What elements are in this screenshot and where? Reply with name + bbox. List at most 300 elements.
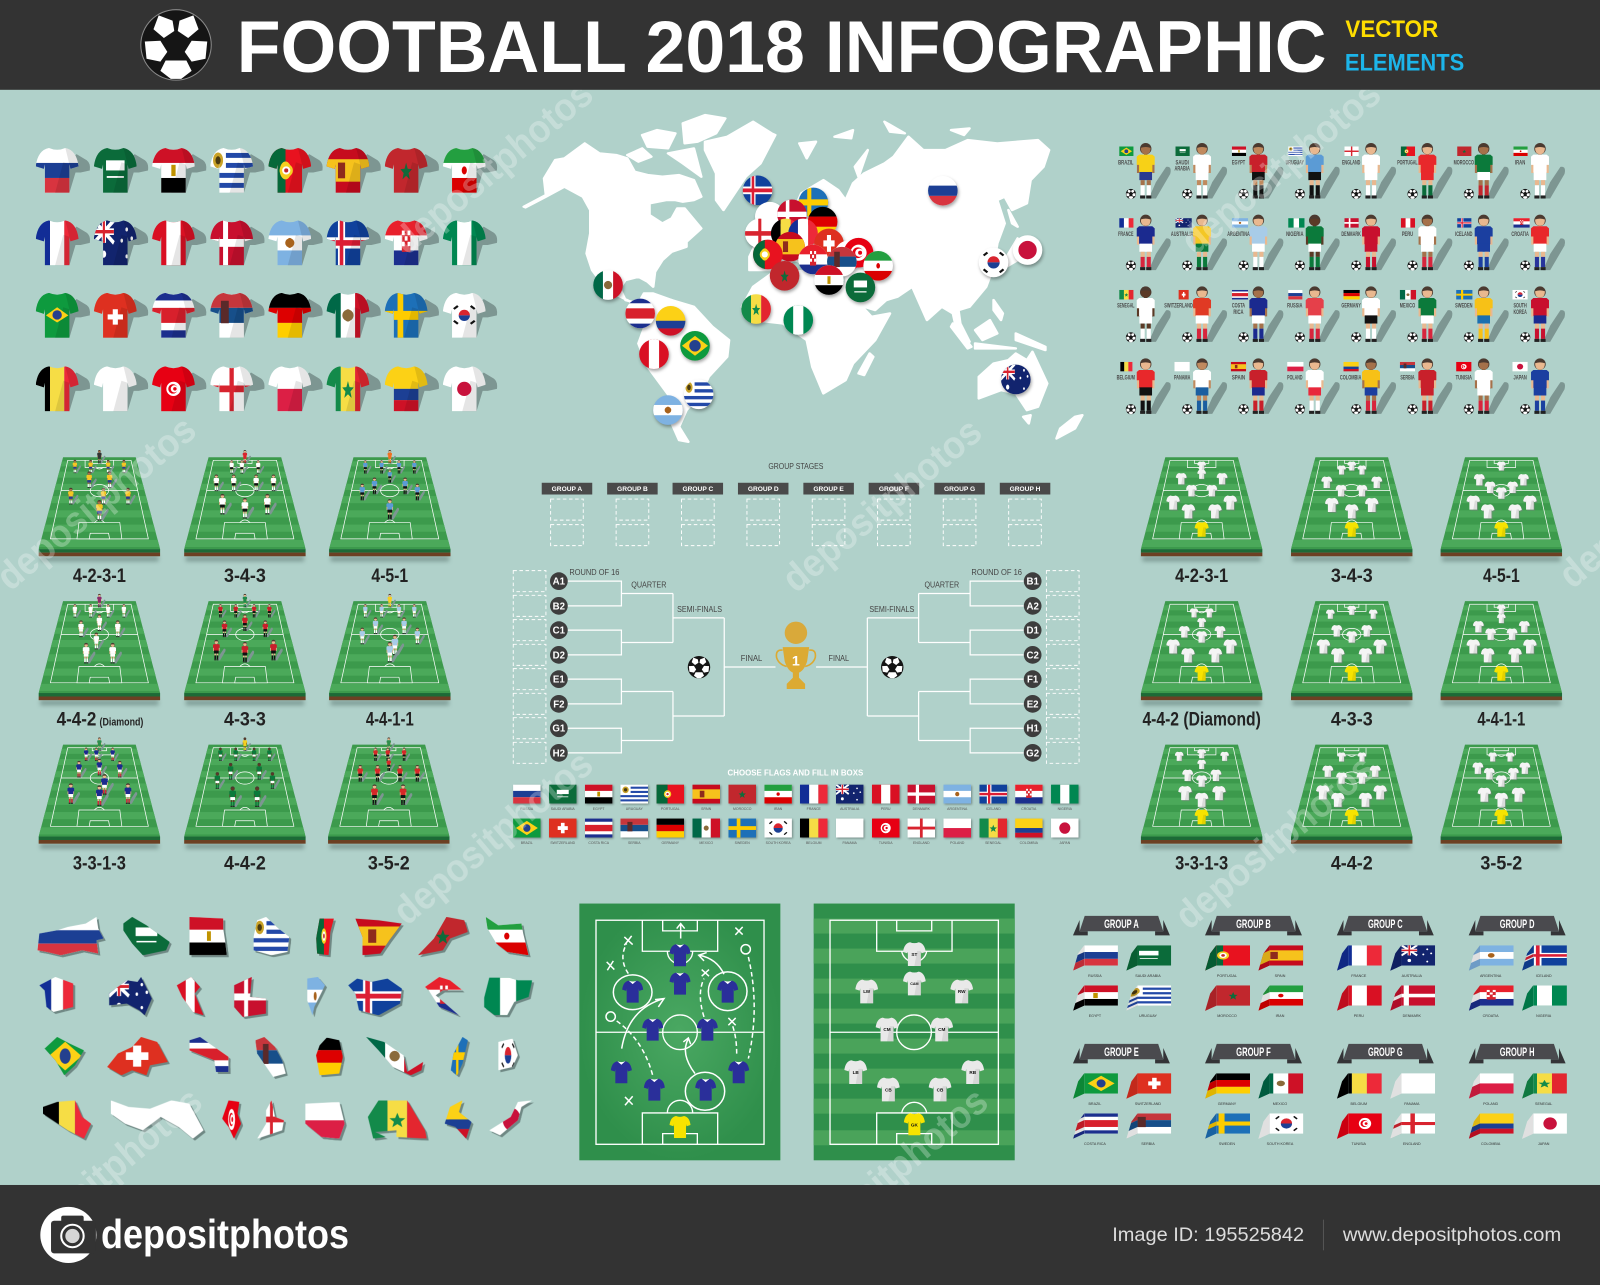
group tabs: GROUP D <box>748 486 779 493</box>
watermarks: depositphotos <box>780 1079 996 1270</box>
formation shirts: 3-5-2 <box>1440 745 1563 875</box>
formation shirts: 3-5-2: 3-5-2 <box>1480 853 1522 875</box>
jersey: Nigeria <box>443 220 497 265</box>
footer band <box>0 1185 1600 1285</box>
subtitle: elements: ELEMENTS <box>1345 49 1464 76</box>
player: Egypt: EGYPT <box>1232 159 1245 166</box>
left seeds: A1 <box>553 577 566 588</box>
flag row 1: PORTUGAL <box>661 807 680 811</box>
board: named positions: CM <box>883 1027 891 1032</box>
player: South Korea <box>1512 286 1565 342</box>
player: Iran: IRAN <box>1515 159 1525 166</box>
icon: trophy <box>776 622 815 689</box>
jersey: Poland <box>268 366 323 411</box>
shape: Morocco <box>418 917 468 955</box>
jersey: Japan <box>443 366 497 411</box>
round labels: QUARTER <box>924 581 959 590</box>
group H: SENEGAL <box>1535 1102 1552 1106</box>
formation shirts: 3-4-3 <box>1291 457 1413 587</box>
player: Brazil <box>1118 143 1171 199</box>
group C: DENMARK <box>1403 1014 1422 1018</box>
right seeds: E2 <box>1027 699 1039 710</box>
player: Colombia: COLOMBIA <box>1340 375 1362 382</box>
group F <box>1205 1044 1303 1146</box>
group C: PERU <box>1354 1014 1364 1018</box>
flag row 1: DENMARK <box>913 807 931 811</box>
shape: Panama <box>111 1100 204 1139</box>
formation: 4-3-3 Egypt <box>184 594 306 731</box>
board: named positions: GK <box>911 1122 918 1127</box>
group C: GROUP C <box>1368 917 1403 931</box>
formation: 4-4-2 Diamond England: 4-4-2 <box>57 709 96 731</box>
pin: Australia <box>1001 364 1031 395</box>
flag row 1: AUSTRALIA <box>840 807 860 811</box>
pin: Colombia <box>655 305 686 336</box>
shape: Denmark <box>234 977 268 1017</box>
flag row 2: COLOMBIA <box>1020 841 1039 845</box>
group H <box>1469 1044 1567 1146</box>
title: FOOTBALL 2018 INFOGRAPHIC <box>237 5 1327 88</box>
group tabs: GROUP C <box>682 486 713 493</box>
group E: BRAZIL <box>1088 1102 1101 1106</box>
round labels: FINAL <box>829 654 849 663</box>
player: Mexico: MEXICO <box>1400 303 1415 310</box>
jersey: France <box>36 220 90 265</box>
player: Saudi Arabia <box>1174 143 1227 199</box>
heading: group stages: GROUP STAGES <box>768 462 824 471</box>
jersey: Spain <box>327 148 381 193</box>
flag row 1: RUSSIA <box>520 807 534 811</box>
player: Japan <box>1512 358 1565 414</box>
formation shirts: 4-4-2 <box>1291 745 1413 875</box>
icon: header football <box>140 9 212 81</box>
player: Argentina <box>1227 215 1283 271</box>
group H: POLAND <box>1483 1102 1498 1106</box>
formation: 3-3-1-3 France: 3-3-1-3 <box>73 853 126 875</box>
formation: 3-4-3 Germany <box>184 450 306 587</box>
group B: IRAN <box>1276 1014 1285 1018</box>
jersey: Iceland <box>327 220 381 265</box>
flag row 1: SAUDI ARABIA <box>551 807 575 811</box>
jersey: Uruguay <box>210 148 264 193</box>
pin: Morocco <box>769 260 800 291</box>
flag row 2: SERBIA <box>628 841 641 845</box>
group tabs: GROUP G <box>944 486 975 493</box>
player: Tunisia <box>1456 358 1509 414</box>
group F: SOUTH KOREA <box>1267 1142 1294 1146</box>
flag row 2: SWEDEN <box>735 841 750 845</box>
board: named positions: CAM <box>910 982 919 986</box>
jersey: Serbia <box>210 293 264 338</box>
group C: FRANCE <box>1351 974 1367 978</box>
flag row 1: URUGUAY <box>626 807 643 811</box>
jersey: England <box>210 366 264 411</box>
group F: MEXICO <box>1273 1102 1287 1106</box>
heading: choose flags: CHOOSE FLAGS AND FILL IN BOXS <box>728 769 864 778</box>
pin: Spain <box>775 231 805 262</box>
pin: Egypt <box>814 265 844 295</box>
group G: TUNISIA <box>1352 1142 1367 1146</box>
jersey: Germany <box>268 293 323 338</box>
board: named positions: CB <box>937 1087 944 1092</box>
player: Costa Rica: COSTA <box>1232 303 1245 310</box>
group tabs: GROUP H <box>1010 486 1041 493</box>
formation: 3-5-2 Belgium: 3-5-2 <box>368 853 410 875</box>
flag pins <box>593 175 1043 425</box>
pin: Peru <box>639 339 669 369</box>
shape: Peru <box>177 977 204 1015</box>
player: Saudi Arabia: ARABIA <box>1174 165 1190 172</box>
player: Nigeria <box>1286 215 1340 271</box>
pin: Tunisia <box>843 237 874 268</box>
shape: Mexico <box>366 1037 423 1075</box>
group A: EGYPT <box>1089 1014 1102 1018</box>
formation: 4-5-1 Uruguay: 4-5-1 <box>371 565 408 587</box>
round labels: QUARTER <box>631 581 667 590</box>
player: Spain: SPAIN <box>1232 375 1245 382</box>
watermarks: depositphotos <box>1167 747 1383 938</box>
pin: Germany <box>807 206 838 237</box>
group C <box>1337 916 1435 1018</box>
bracket fill-in boxes <box>513 571 1079 763</box>
group D: ICELAND <box>1536 974 1552 978</box>
formation shirts: 4-4-2: 4-4-2 <box>1331 853 1373 875</box>
jersey: Sweden <box>385 293 439 338</box>
shape: Poland <box>305 1102 346 1139</box>
group F: SWEDEN <box>1219 1142 1235 1146</box>
shape: Portugal <box>316 917 336 955</box>
left seeds: D2 <box>553 650 565 661</box>
formation: 4-5-1 Uruguay <box>329 450 451 587</box>
board: named positions: LB <box>853 1070 859 1075</box>
group F: GROUP F <box>1236 1045 1271 1059</box>
jersey: Iran <box>443 148 497 193</box>
formation shirts: 4-3-3 <box>1291 601 1413 731</box>
flag row 1: CROATIA <box>1021 807 1037 811</box>
player: Denmark: DENMARK <box>1341 231 1361 238</box>
right seeds: A2 <box>1026 601 1039 612</box>
panel: tactics boards <box>579 904 1015 1160</box>
pin: Croatia <box>798 244 828 275</box>
group H: COLOMBIA <box>1481 1142 1501 1146</box>
shape: Russia <box>36 917 104 957</box>
flag row 2: MEXICO <box>699 841 713 845</box>
player: Sweden <box>1455 286 1509 342</box>
jersey: Peru <box>152 220 206 265</box>
flag row 2: COSTA RICA <box>588 841 610 845</box>
pin: Poland <box>834 240 864 270</box>
group F: GERMANY <box>1218 1102 1237 1106</box>
watermarks: depositphotos <box>385 72 601 263</box>
player: Australia <box>1171 215 1227 271</box>
flag row 1: ICELAND <box>986 807 1001 811</box>
flag row 1 <box>513 785 1079 811</box>
player: Switzerland: SWITZERLAND <box>1164 303 1193 310</box>
panel: formations with shirts <box>1140 457 1563 875</box>
shape: France <box>39 977 75 1012</box>
formation: 3-5-2 Belgium <box>328 737 450 875</box>
formation: 4-4-2 Diamond England: (Diamond) <box>99 717 144 729</box>
group tabs: GROUP E <box>813 486 844 493</box>
left seeds: F2 <box>553 699 565 710</box>
board: named positions: ST <box>911 952 917 957</box>
shape: England <box>257 1100 286 1139</box>
shape: Japan <box>489 1100 534 1139</box>
jersey: Panama <box>94 366 148 411</box>
pin: Costa Rica <box>625 298 656 329</box>
group G: PANAMA <box>1404 1102 1420 1106</box>
flag row 2: GERMANY <box>662 841 680 845</box>
player: Belgium <box>1117 358 1171 414</box>
player: Poland <box>1287 358 1340 414</box>
shape: Belgium <box>43 1100 91 1139</box>
round labels: ROUND OF 16 <box>971 568 1022 577</box>
player: Brazil: BRAZIL <box>1118 159 1134 166</box>
watermarks: depositphotos <box>774 410 990 601</box>
player: Spain <box>1231 358 1283 414</box>
flag row 2: BELGIUM <box>806 841 822 845</box>
player: Croatia: CROATIA <box>1511 231 1529 238</box>
group D: GROUP D <box>1500 917 1535 931</box>
shape: Egypt <box>189 917 229 955</box>
jersey: Australia <box>94 220 148 265</box>
group E: SERBIA <box>1141 1142 1155 1146</box>
panel: team jerseys <box>36 148 497 411</box>
group B: GROUP B <box>1236 917 1271 931</box>
pin: Belgium <box>770 218 801 249</box>
player: Uruguay: URUGUAY <box>1286 159 1304 166</box>
group B <box>1205 916 1303 1018</box>
flag row 2: BRAZIL <box>521 841 533 845</box>
shape: Nigeria <box>484 977 532 1015</box>
pin: Iran <box>863 250 893 281</box>
group E <box>1073 1044 1171 1146</box>
flag row 2: PANAMA <box>843 841 858 845</box>
jersey: Switzerland <box>94 293 148 338</box>
group tabs: GROUP A <box>552 486 582 493</box>
shape: Spain <box>355 917 404 955</box>
player: South Korea: KOREA <box>1513 309 1527 316</box>
panel: country shapes <box>36 917 534 1139</box>
flag row 2: POLAND <box>950 841 965 845</box>
player: Uruguay <box>1286 143 1340 199</box>
shape: Saudi Arabia <box>121 917 171 955</box>
panel: group flags <box>1073 916 1567 1146</box>
group E: SWITZERLAND <box>1135 1102 1161 1106</box>
left seeds: G1 <box>552 724 566 735</box>
player: Germany: GERMANY <box>1341 303 1361 310</box>
player: England: ENGLAND <box>1342 159 1361 166</box>
panel: player kits <box>1117 143 1565 414</box>
right seeds: D1 <box>1026 626 1039 637</box>
right seeds <box>1024 572 1042 762</box>
group B: PORTUGAL <box>1217 974 1237 978</box>
player: Russia: RUSSIA <box>1287 303 1303 310</box>
left seeds <box>550 572 568 762</box>
shape: Costa Rica <box>189 1037 229 1072</box>
pin: Switzerland <box>814 228 844 259</box>
player: Portugal: PORTUGAL <box>1397 159 1418 166</box>
jersey: Belgium <box>36 366 90 411</box>
flag row 1: NIGERIA <box>1058 807 1073 811</box>
player: South Korea: SOUTH <box>1513 303 1527 310</box>
formation shirts: 4-4-1-1 <box>1440 601 1563 731</box>
shape: Australia <box>109 977 152 1015</box>
player: Australia: AUSTRALIA <box>1171 231 1194 238</box>
left seeds: H2 <box>553 748 565 759</box>
shape: Iran <box>485 917 529 955</box>
formation: 3-4-3 Germany: 3-4-3 <box>224 565 266 587</box>
group G: ENGLAND <box>1403 1142 1421 1146</box>
shape: Uruguay <box>253 917 290 955</box>
jersey: Costa Rica <box>152 293 206 338</box>
player: Tunisia: TUNISIA <box>1456 375 1472 382</box>
panel: choose flags <box>513 769 1079 845</box>
formation shirts: 4-3-3: 4-3-3 <box>1331 709 1373 731</box>
group D: CROATIA <box>1483 1014 1499 1018</box>
jersey: Egypt <box>152 148 206 193</box>
group A: URUGUAY <box>1139 1014 1158 1018</box>
pin: Uruguay <box>683 379 714 410</box>
image id: Image ID: 195525842 <box>1112 1224 1304 1246</box>
player: Peru <box>1401 215 1452 271</box>
pin: Japan <box>1012 235 1043 265</box>
group A: RUSSIA <box>1088 974 1102 978</box>
flag row 1: MOROCCO <box>733 807 752 811</box>
pin: Sweden <box>798 187 829 218</box>
formation: 4-4-2 Nigeria <box>184 737 306 875</box>
watermarks: depositphotos <box>1173 72 1389 263</box>
pin: Panama <box>754 202 781 226</box>
player: Senegal <box>1117 286 1171 342</box>
jersey: Colombia <box>385 366 439 411</box>
watermarks: depositphotos <box>385 743 601 934</box>
group A <box>1073 916 1171 1018</box>
panel: world map with flag pins <box>524 115 1082 442</box>
player: Russia <box>1287 286 1340 342</box>
flag row 2 <box>513 819 1079 845</box>
player: Saudi Arabia: SAUDI <box>1176 159 1189 166</box>
group G: GROUP G <box>1368 1045 1403 1059</box>
jersey: Brazil <box>36 293 90 338</box>
pin: Russia <box>928 175 958 206</box>
pin: Saudi Arabia <box>845 272 876 303</box>
icon: trophy: 1 <box>792 653 800 669</box>
icon: semi-final ball right <box>881 656 903 678</box>
player: France: FRANCE <box>1118 231 1133 238</box>
flag row 1: PERU <box>881 807 891 811</box>
jersey: Russia <box>36 148 90 193</box>
player: Serbia: SERBIA <box>1400 375 1415 382</box>
group H: GROUP H <box>1500 1045 1535 1059</box>
left seeds: C1 <box>553 626 566 637</box>
formation shirts: 4-5-1 <box>1440 457 1563 587</box>
player: Panama: PANAMA <box>1174 375 1191 382</box>
panel: group stages <box>542 462 1050 546</box>
right seeds: F1 <box>1027 675 1039 686</box>
player: Japan: JAPAN <box>1513 375 1527 382</box>
jersey: Senegal <box>327 366 381 411</box>
group D: NIGERIA <box>1536 1014 1552 1018</box>
panel: formations with players <box>38 450 451 875</box>
jersey: Saudi Arabia <box>94 148 148 193</box>
formation shirts: 4-4-1-1: 4-4-1-1 <box>1477 709 1525 731</box>
player: Iceland: ICELAND <box>1455 231 1473 238</box>
flag row 2: SENEGAL <box>985 841 1001 845</box>
shape: Argentina <box>305 977 325 1015</box>
pin: Senegal <box>741 294 771 324</box>
formation: 4-4-1-1 Argentina <box>329 594 451 731</box>
round labels: ROUND OF 16 <box>569 568 620 577</box>
player: Portugal <box>1397 143 1452 199</box>
board: named positions: RW <box>958 989 966 994</box>
pin: Nigeria <box>783 305 814 335</box>
group E: GROUP E <box>1104 1045 1139 1059</box>
pin: Iceland <box>742 175 773 206</box>
group A: GROUP A <box>1104 917 1139 931</box>
formation: 4-4-1-1 Argentina: 4-4-1-1 <box>366 709 414 731</box>
board: named positions: LW <box>863 989 871 994</box>
group E: COSTA RICA <box>1084 1142 1106 1146</box>
player: Belgium: BELGIUM <box>1117 375 1135 382</box>
board: named positions: CB <box>885 1087 892 1092</box>
player: Denmark <box>1341 215 1396 271</box>
player: Serbia <box>1400 358 1452 414</box>
pin: England <box>744 218 775 249</box>
pin: Brazil <box>680 330 710 361</box>
player: Mexico <box>1400 286 1452 342</box>
flag row 1: IRAN <box>774 807 783 811</box>
logo text: depositphotos <box>101 1211 349 1257</box>
jersey: Denmark <box>210 220 264 265</box>
board: tactics plan <box>579 904 780 1160</box>
player: England <box>1342 143 1396 199</box>
website: www.depositphotos.com <box>1342 1224 1561 1246</box>
shape: Brazil <box>45 1037 86 1075</box>
shape: Germany <box>316 1038 343 1075</box>
left seeds: E1 <box>553 675 565 686</box>
group fill-in boxes <box>551 499 1041 546</box>
jersey: Mexico <box>327 293 381 338</box>
round labels: SEMI-FINALS <box>869 605 915 614</box>
icon: semi-final ball left <box>688 656 710 678</box>
group A: SAUDI ARABIA <box>1135 974 1161 978</box>
shape: Sweden <box>451 1037 469 1075</box>
group G <box>1337 1044 1435 1146</box>
player: Germany <box>1341 286 1396 342</box>
group H: JAPAN <box>1538 1142 1550 1146</box>
board: named positions: CM <box>938 1027 945 1032</box>
group B: SPAIN <box>1275 974 1286 978</box>
header band <box>0 0 1600 90</box>
pin: France <box>788 218 818 249</box>
jersey: Croatia <box>385 220 439 265</box>
player: Panama <box>1174 358 1227 414</box>
formation: 4-2-3-1 Brazil: 4-2-3-1 <box>73 565 126 587</box>
player: Peru: PERU <box>1402 231 1413 238</box>
flag row 2: SOUTH KOREA <box>766 841 791 845</box>
right seeds: G2 <box>1026 748 1039 759</box>
jersey: Morocco <box>385 148 439 193</box>
board: named positions <box>814 904 1015 1160</box>
flag row 2: ENGLAND <box>913 841 930 845</box>
player: Poland: POLAND <box>1287 375 1303 382</box>
flag row 2: JAPAN <box>1059 841 1071 845</box>
right seeds: H1 <box>1026 724 1039 735</box>
player: Colombia <box>1340 358 1396 414</box>
flag row 2: SWITZERLAND <box>550 841 576 845</box>
formation shirts: 3-3-1-3 <box>1140 745 1263 875</box>
